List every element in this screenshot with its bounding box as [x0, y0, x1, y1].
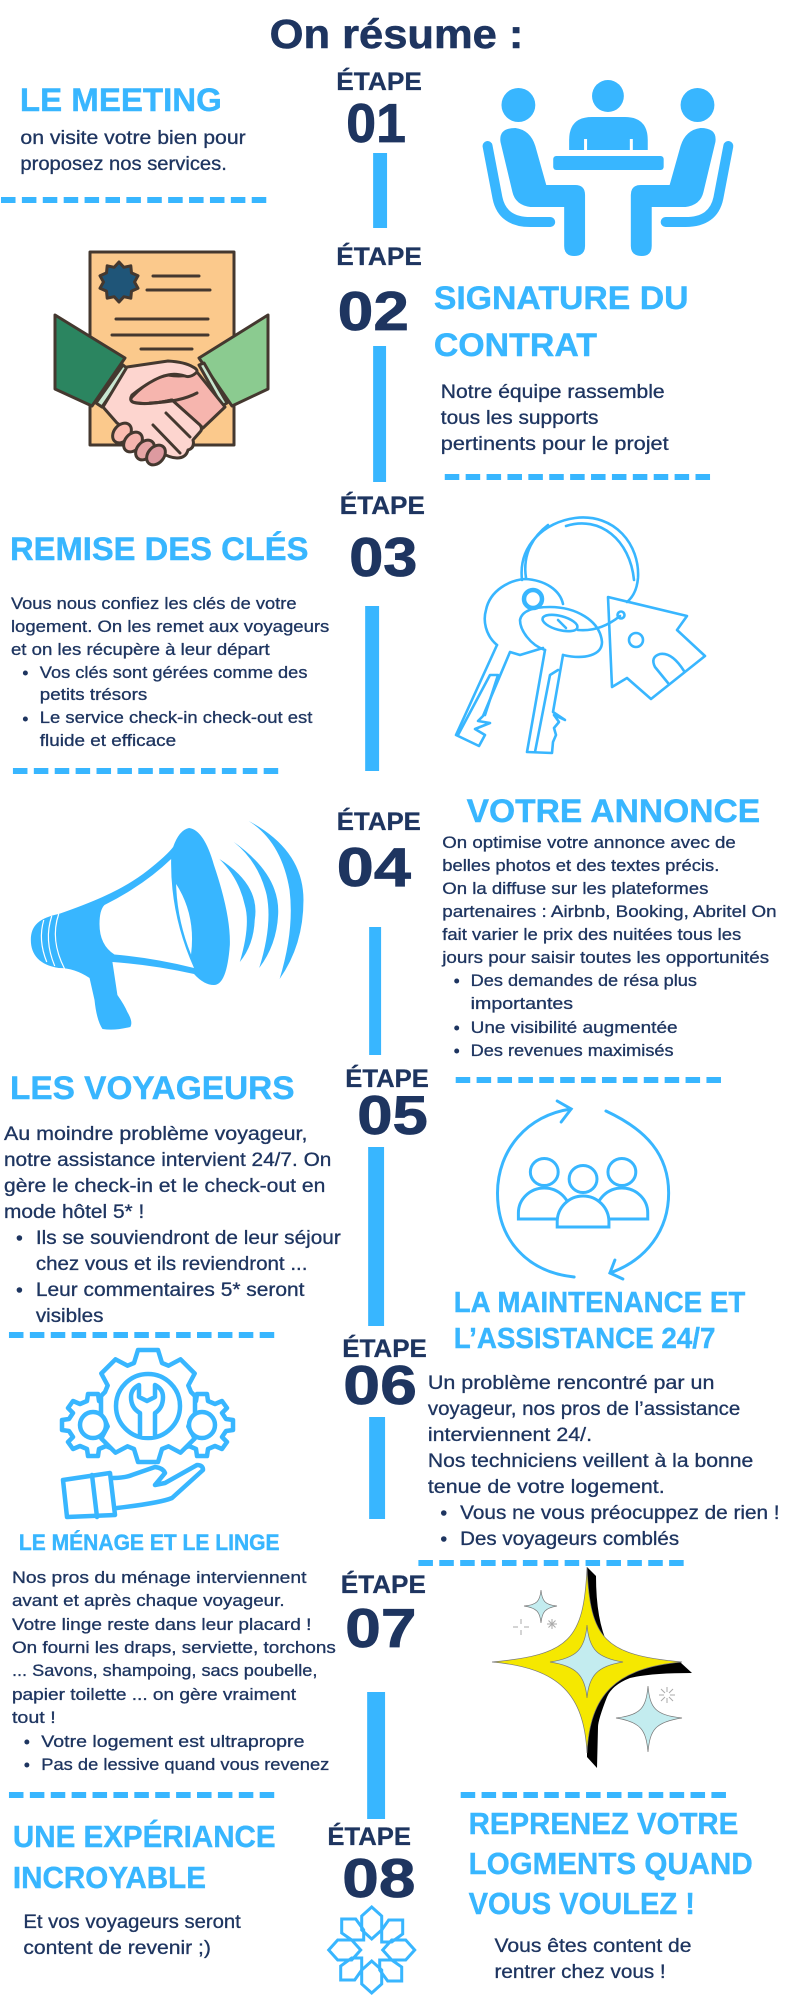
step 04 marker: 04	[337, 836, 412, 898]
panel: une expériance incroyable: INCROYABLE	[13, 1860, 206, 1895]
panel: les voyageurs: chez vous et ils reviendront ...	[36, 1254, 307, 1275]
panel: la maintenance et l'assistance	[418, 1287, 780, 1563]
panel: la maintenance et l'assistance: Un problème rencontré par un	[428, 1373, 714, 1394]
title: On résume :	[270, 11, 523, 57]
step 02 marker: ÉTAPE	[336, 242, 422, 271]
panel: le ménage et le linge: papier toilette ... on gère vraiment	[12, 1685, 296, 1704]
panel: les voyageurs	[4, 1070, 341, 1335]
panel: le ménage et le linge: Pas de lessive quand vous revenez	[41, 1755, 329, 1774]
panel: les voyageurs: visibles	[36, 1306, 103, 1327]
icon: keys with house tag	[456, 517, 705, 753]
panel: signature du contrat: tous les supports	[441, 408, 598, 429]
panel: votre annonce: On optimise votre annonce avec de	[442, 833, 736, 852]
step 01 marker: 01	[346, 92, 406, 154]
step 01 marker: ÉTAPE	[336, 67, 422, 96]
step 04 marker: ÉTAPE	[337, 807, 421, 836]
panel: remise des clés: et on les récupère à leur départ	[11, 640, 270, 659]
panel: la maintenance et l'assistance: interviennent 24/.	[428, 1425, 592, 1446]
step 05 marker: ÉTAPE	[345, 1064, 429, 1093]
panel: remise des clés: logement. On les remet aux voyageurs	[11, 617, 329, 636]
step 02 marker: 02	[338, 280, 409, 342]
panel: le meeting: LE MEETING	[20, 82, 222, 118]
panel: le ménage et le linge: Votre linge reste dans leur placard !	[12, 1615, 311, 1634]
panel: les voyageurs: notre assistance intervient 24/7. On	[4, 1150, 331, 1171]
panel: remise des clés: fluide et efficace	[40, 731, 176, 750]
panel: reprenez votre logement: LOGMENTS QUAND	[469, 1846, 753, 1881]
step 07 marker: 07	[345, 1597, 416, 1659]
panel: le meeting	[1, 82, 268, 200]
panel: le ménage et le linge: ... Savons, shampoing, sacs poubelle,	[12, 1661, 317, 1680]
panel: votre annonce: importantes	[471, 994, 573, 1013]
panel: les voyageurs: gère le check-in et le check-out en	[4, 1176, 325, 1197]
step 05 marker: 05	[357, 1084, 428, 1146]
step 04 marker	[337, 807, 421, 1055]
panel: une expériance incroyable: content de revenir ;)	[23, 1938, 211, 1959]
panel: une expériance incroyable	[13, 1795, 726, 1959]
panel: votre annonce: Des revenues maximisés	[471, 1041, 674, 1060]
step 05 marker	[345, 1064, 429, 1326]
panel: les voyageurs: mode hôtel 5* !	[4, 1202, 144, 1223]
icon: meeting people	[488, 80, 728, 256]
panel: votre annonce: On la diffuse sur les plateformes	[442, 879, 708, 898]
panel: les voyageurs: Leur commentaires 5* seront	[36, 1280, 305, 1301]
icon: sparkling stars	[492, 1567, 692, 1768]
panel: les voyageurs: LES VOYAGEURS	[10, 1070, 295, 1106]
panel: votre annonce: partenaires : Airbnb, Booking, Abritel On	[442, 902, 777, 921]
step 07 marker	[341, 1570, 426, 1819]
panel: la maintenance et l'assistance: voyageur, nos pros de l’assistance	[428, 1399, 740, 1420]
icon: handshake and contract	[55, 252, 268, 469]
step 06 marker	[342, 1334, 427, 1519]
step 06 marker: ÉTAPE	[342, 1334, 427, 1363]
panel: signature du contrat: Notre équipe rassemble	[441, 382, 665, 403]
panel: remise des clés: REMISE DES CLÉS	[10, 531, 308, 567]
icon: gears on hand	[62, 1350, 233, 1517]
panel: votre annonce: belles photos et des textes précis.	[442, 856, 719, 875]
panel: votre annonce: fait varier le prix des nuitées tous les	[442, 925, 741, 944]
step 06 marker: 06	[343, 1354, 417, 1416]
panel: les voyageurs: Au moindre problème voyageur,	[4, 1124, 307, 1145]
icon: megaphone	[31, 821, 303, 1030]
icon: geometric flower	[329, 1907, 415, 1993]
panel: le ménage et le linge	[9, 1530, 336, 1795]
step 01 marker	[336, 67, 422, 228]
panel: votre annonce: VOTRE ANNONCE	[467, 793, 760, 829]
panel: une expériance incroyable: Et vos voyageurs seront	[23, 1912, 242, 1933]
panel: la maintenance et l'assistance: Nos techniciens veillent à la bonne	[428, 1451, 753, 1472]
panel: signature du contrat: SIGNATURE DU	[434, 280, 689, 316]
panel: signature du contrat	[434, 280, 711, 477]
panel: la maintenance et l'assistance: tenue de votre logement.	[428, 1477, 665, 1498]
panel: remise des clés: Vos clés sont gérées comme des	[40, 663, 307, 682]
panel: votre annonce: Des demandes de résa plus	[471, 971, 697, 990]
panel: remise des clés: petits trésors	[40, 685, 147, 704]
panel: remise des clés: Le service check-in check-out est	[40, 708, 313, 727]
panel: la maintenance et l'assistance: Vous ne vous préocuppez de rien !	[460, 1503, 780, 1524]
panel: remise des clés: Vous nous confiez les clés de votre	[11, 594, 297, 613]
step 03 marker	[340, 491, 425, 771]
step 08 marker: ÉTAPE	[327, 1822, 411, 1851]
panel: la maintenance et l'assistance: L’ASSISTANCE 24/7	[454, 1323, 715, 1355]
panel: le ménage et le linge: LE MÉNAGE ET LE LINGE	[19, 1530, 280, 1555]
step 08 marker	[327, 1822, 415, 1909]
panel: reprenez votre logement: VOUS VOULEZ !	[469, 1886, 695, 1921]
panel: le ménage et le linge: tout !	[12, 1708, 56, 1727]
panel: votre annonce: Une visibilité augmentée	[471, 1018, 678, 1037]
step 03 marker: ÉTAPE	[340, 491, 425, 520]
panel: reprenez votre logement: Vous êtes content de	[495, 1936, 692, 1957]
panel: la maintenance et l'assistance: LA MAINTENANCE ET	[454, 1287, 746, 1319]
panel: votre annonce: jours pour saisir toutes les opportunités	[441, 948, 769, 967]
step 07 marker: ÉTAPE	[341, 1570, 426, 1599]
step 03 marker: 03	[349, 526, 417, 588]
panel: le meeting: on visite votre bien pour	[20, 128, 246, 149]
panel: la maintenance et l'assistance: Des voyageurs comblés	[460, 1529, 679, 1550]
panel: le meeting: proposez nos services.	[20, 154, 227, 175]
step 02 marker	[336, 242, 422, 482]
panel: une expériance incroyable: UNE EXPÉRIANCE	[13, 1819, 276, 1854]
icon: people in cycle	[498, 1101, 669, 1279]
panel: reprenez votre logement: rentrer chez vous !	[495, 1962, 666, 1983]
panel: reprenez votre logement	[469, 1806, 753, 1983]
panel: le ménage et le linge: On fourni les draps, serviette, torchons	[12, 1638, 336, 1657]
panel: signature du contrat: CONTRAT	[434, 327, 598, 363]
panel: le ménage et le linge: Votre logement est ultrapropre	[41, 1732, 304, 1751]
panel: les voyageurs: Ils se souviendront de leur séjour	[36, 1228, 341, 1249]
panel: le ménage et le linge: avant et après chaque voyageur.	[12, 1591, 285, 1610]
step 08 marker: 08	[342, 1847, 415, 1909]
panel: signature du contrat: pertinents pour le projet	[441, 434, 669, 455]
panel: reprenez votre logement: REPRENEZ VOTRE	[469, 1806, 738, 1841]
panel: votre annonce	[441, 793, 777, 1080]
panel: remise des clés	[10, 531, 329, 771]
panel: le ménage et le linge: Nos pros du ménage interviennent	[12, 1568, 307, 1587]
